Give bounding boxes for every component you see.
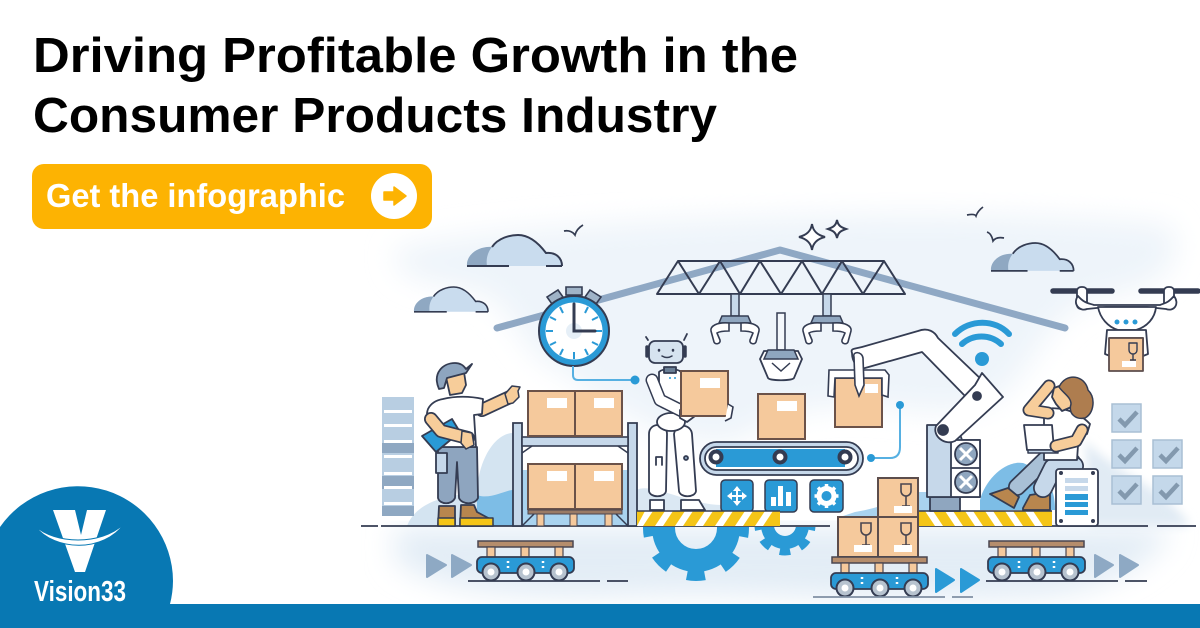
seated woman with laptop: [990, 377, 1093, 510]
head: [446, 372, 466, 395]
gears under the floor: [643, 527, 816, 581]
stopwatch: [539, 287, 640, 384]
shirt: [1044, 408, 1090, 460]
front leg: [1043, 466, 1074, 488]
control icons: [721, 480, 843, 512]
face: [1052, 382, 1076, 411]
hair: [1059, 377, 1093, 418]
ladder of status bars: [382, 397, 414, 516]
boots: [438, 505, 493, 526]
back leg: [1017, 458, 1072, 487]
tablet: [422, 419, 460, 452]
folded arm: [431, 419, 468, 438]
birds: [564, 207, 1004, 241]
clouds: [414, 235, 1074, 312]
pallet shelf with boxes: [513, 391, 637, 526]
robotic arm: [852, 330, 1003, 511]
worker: [422, 363, 520, 526]
title: Driving Profitable Growth in the: [33, 29, 798, 83]
raised arm: [1029, 386, 1049, 413]
connector: [573, 366, 632, 380]
title second line: Consumer Products Industry: [33, 89, 717, 143]
grippers: [711, 294, 851, 380]
forearm: [1056, 430, 1082, 446]
call to action button: [32, 164, 432, 229]
logo: Vision33: Vision33: [34, 576, 126, 608]
trousers: [438, 447, 478, 503]
drone carrying package: [1053, 287, 1198, 371]
warehouse roof line: [497, 250, 1065, 328]
bottom band: [0, 604, 1200, 628]
wifi symbol: [955, 323, 1009, 366]
boots: [990, 488, 1019, 508]
checklist boxes: [1112, 404, 1182, 504]
illustration backdrop: [395, 215, 1190, 599]
box in arm grip: [828, 353, 889, 427]
box on belt: [758, 394, 805, 439]
overhead truss: [657, 261, 905, 294]
connector dot line: [867, 401, 904, 462]
shirt: [427, 397, 483, 447]
logo: Vision33: [0, 486, 173, 628]
icon: arrow circle: [371, 173, 417, 219]
pointing arm: [482, 397, 510, 410]
sparkle stars: [799, 220, 846, 250]
call to action button: Get the infographic: [46, 177, 345, 214]
hazard strips: [637, 511, 1052, 526]
control cabinet seat: [1056, 469, 1098, 526]
stacked fragile boxes: [838, 478, 918, 557]
conveyor belt: [700, 394, 863, 475]
robot: [646, 334, 705, 510]
box held by robot: [681, 371, 733, 421]
laptop: [1024, 425, 1054, 450]
automated carts and arrows: [427, 541, 1147, 598]
floor line: [361, 525, 1196, 527]
